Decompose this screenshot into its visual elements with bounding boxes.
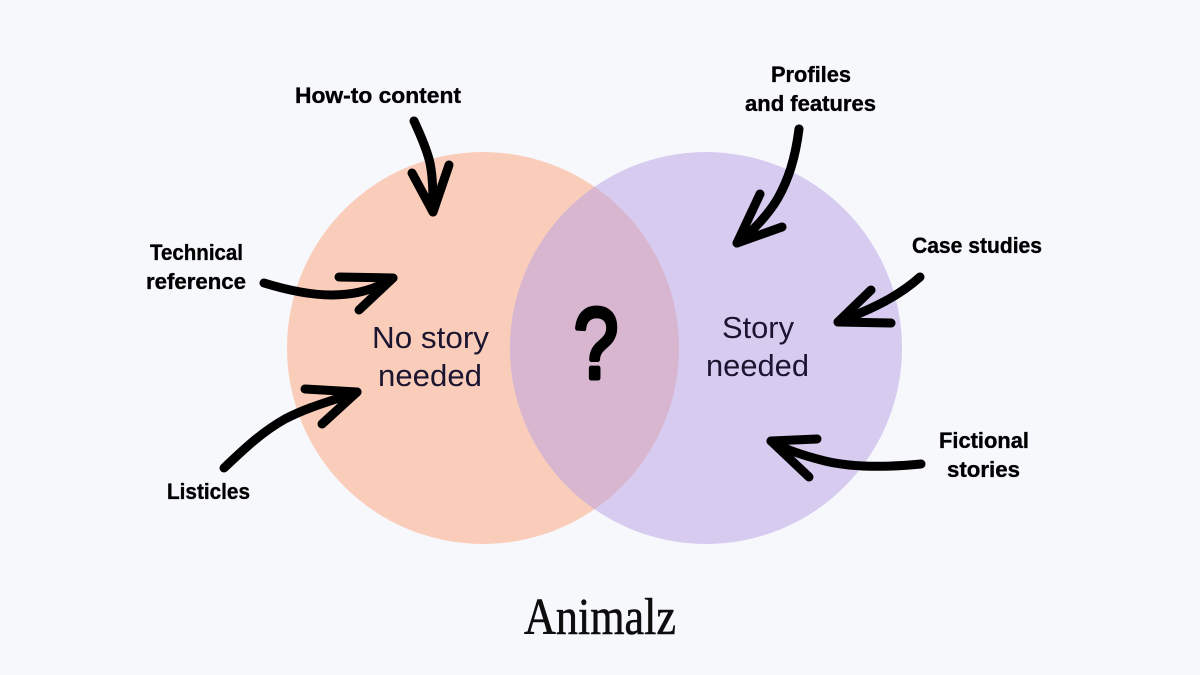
arrow: case studies <box>838 277 920 323</box>
label: profiles and features: and features <box>745 91 876 116</box>
circle: story needed <box>510 152 902 544</box>
arrow: technical reference <box>264 277 393 310</box>
label: profiles and features: Profiles <box>771 62 851 87</box>
text: no story needed: needed <box>378 358 482 393</box>
overlap region <box>510 187 679 509</box>
label: technical reference: Technical <box>150 240 243 265</box>
text: story needed: needed <box>706 348 809 383</box>
label: how-to content: How-to content <box>295 83 462 108</box>
question mark: ? <box>574 289 618 400</box>
label: listicles: Listicles <box>167 479 250 504</box>
text: story needed <box>706 310 809 383</box>
label: fictional stories: Fictional <box>939 428 1029 453</box>
text: no story needed <box>372 320 490 393</box>
arrow: profiles and features <box>737 129 799 243</box>
text: no story needed: No story <box>372 320 490 355</box>
arrow: listicles <box>224 389 357 468</box>
label: technical reference: reference <box>146 269 246 294</box>
arrow: fictional stories <box>771 439 921 477</box>
logo: Animalz: Animalz <box>524 589 676 646</box>
label: profiles and features <box>745 62 876 116</box>
circle: no story needed <box>287 152 679 544</box>
label: case studies: Case studies <box>912 233 1042 258</box>
venn diagram <box>287 152 902 544</box>
label: technical reference <box>146 240 246 294</box>
arrow: how-to content <box>412 121 449 212</box>
label: fictional stories <box>939 428 1029 482</box>
text: story needed: Story <box>722 310 794 345</box>
label: fictional stories: stories <box>947 457 1020 482</box>
